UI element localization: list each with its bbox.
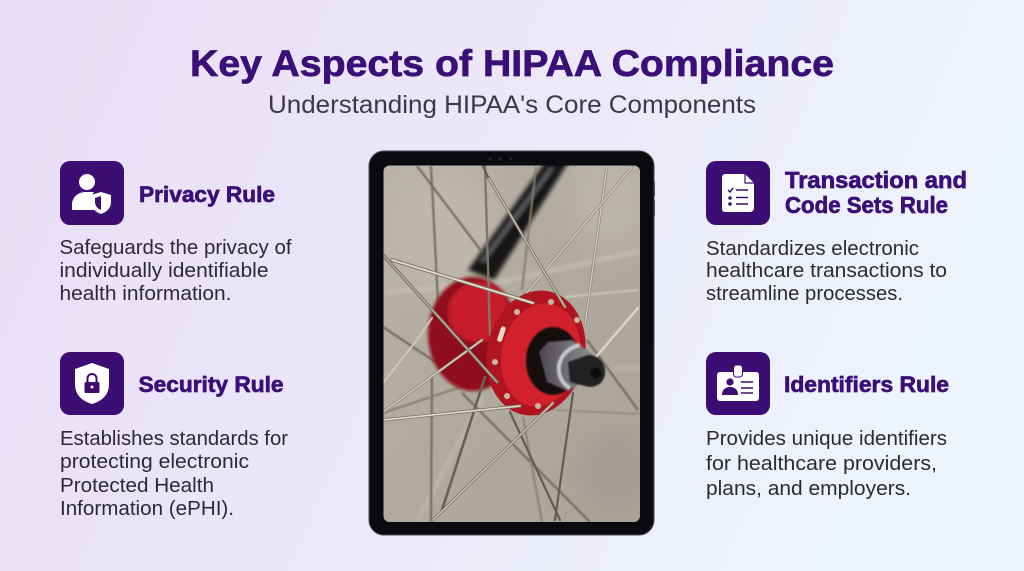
text: privacy rule description bbox=[60, 237, 292, 305]
tablet frame bbox=[369, 151, 655, 535]
heading: security rule: Security Rule bbox=[138, 372, 284, 397]
heading: transaction and code sets rule bbox=[785, 167, 967, 218]
icon: user with shield bbox=[60, 161, 124, 225]
icon: id badge bbox=[706, 352, 770, 415]
icon: checklist document bbox=[706, 161, 770, 225]
text: transaction rule description: streamline processes. bbox=[706, 283, 903, 305]
hub bearing bbox=[526, 327, 580, 395]
heading: privacy rule: Privacy Rule bbox=[139, 182, 275, 207]
text: privacy rule description: health information. bbox=[60, 283, 232, 305]
heading: identifiers rule: Identifiers Rule bbox=[784, 372, 949, 397]
foreground spokes bbox=[383, 166, 565, 520]
text: transaction rule description bbox=[706, 238, 947, 305]
text: transaction rule description: Standardizes electronic bbox=[706, 238, 919, 260]
text: security rule description: protecting electronic bbox=[60, 451, 249, 473]
text: identifiers rule description bbox=[706, 428, 947, 500]
title: Key Aspects of HIPAA Compliance bbox=[190, 43, 834, 84]
photo backdrop shading bbox=[411, 166, 640, 492]
axle silver ring bbox=[559, 345, 580, 388]
blurred rear spokes bbox=[385, 251, 640, 522]
text: privacy rule description: individually identifiable bbox=[60, 260, 268, 282]
text: identifiers rule description: Provides unique identifiers bbox=[706, 428, 947, 450]
tablet with bicycle wheel photo bbox=[369, 150, 655, 535]
hub flange bolts bbox=[492, 299, 580, 409]
text: security rule description: Protected Health bbox=[60, 475, 214, 497]
sharp spokes bbox=[383, 166, 638, 520]
text: security rule description: Establishes standards for bbox=[60, 428, 288, 450]
text: security rule description bbox=[60, 428, 288, 520]
panel: transaction and code sets rule bbox=[706, 161, 967, 305]
axle cone bbox=[539, 340, 593, 391]
text: privacy rule description: Safeguards the privacy of bbox=[60, 237, 292, 259]
heading: transaction and code sets rule: Code Sets Rule bbox=[785, 192, 948, 218]
heading: transaction and code sets rule: Transaction and bbox=[785, 167, 967, 193]
text: transaction rule description: healthcare transactions to bbox=[706, 260, 947, 282]
axle end cap bbox=[568, 355, 605, 387]
rear hub flange bbox=[428, 277, 518, 391]
front hub flange bbox=[486, 290, 586, 416]
text: identifiers rule description: for healthcare providers, bbox=[706, 453, 937, 475]
text: identifiers rule description: plans, and employers. bbox=[706, 478, 911, 500]
icon: shield with padlock bbox=[60, 352, 124, 415]
photo: bicycle wheel hub and spokes bbox=[383, 150, 655, 523]
text: security rule description: Information (ePHI). bbox=[60, 498, 234, 520]
panel: identifiers rule bbox=[706, 352, 949, 500]
blurred frame tube bbox=[468, 158, 571, 280]
panel: privacy rule bbox=[60, 161, 292, 305]
panel: security rule bbox=[60, 352, 288, 520]
subtitle: Understanding HIPAA's Core Components bbox=[268, 91, 756, 119]
